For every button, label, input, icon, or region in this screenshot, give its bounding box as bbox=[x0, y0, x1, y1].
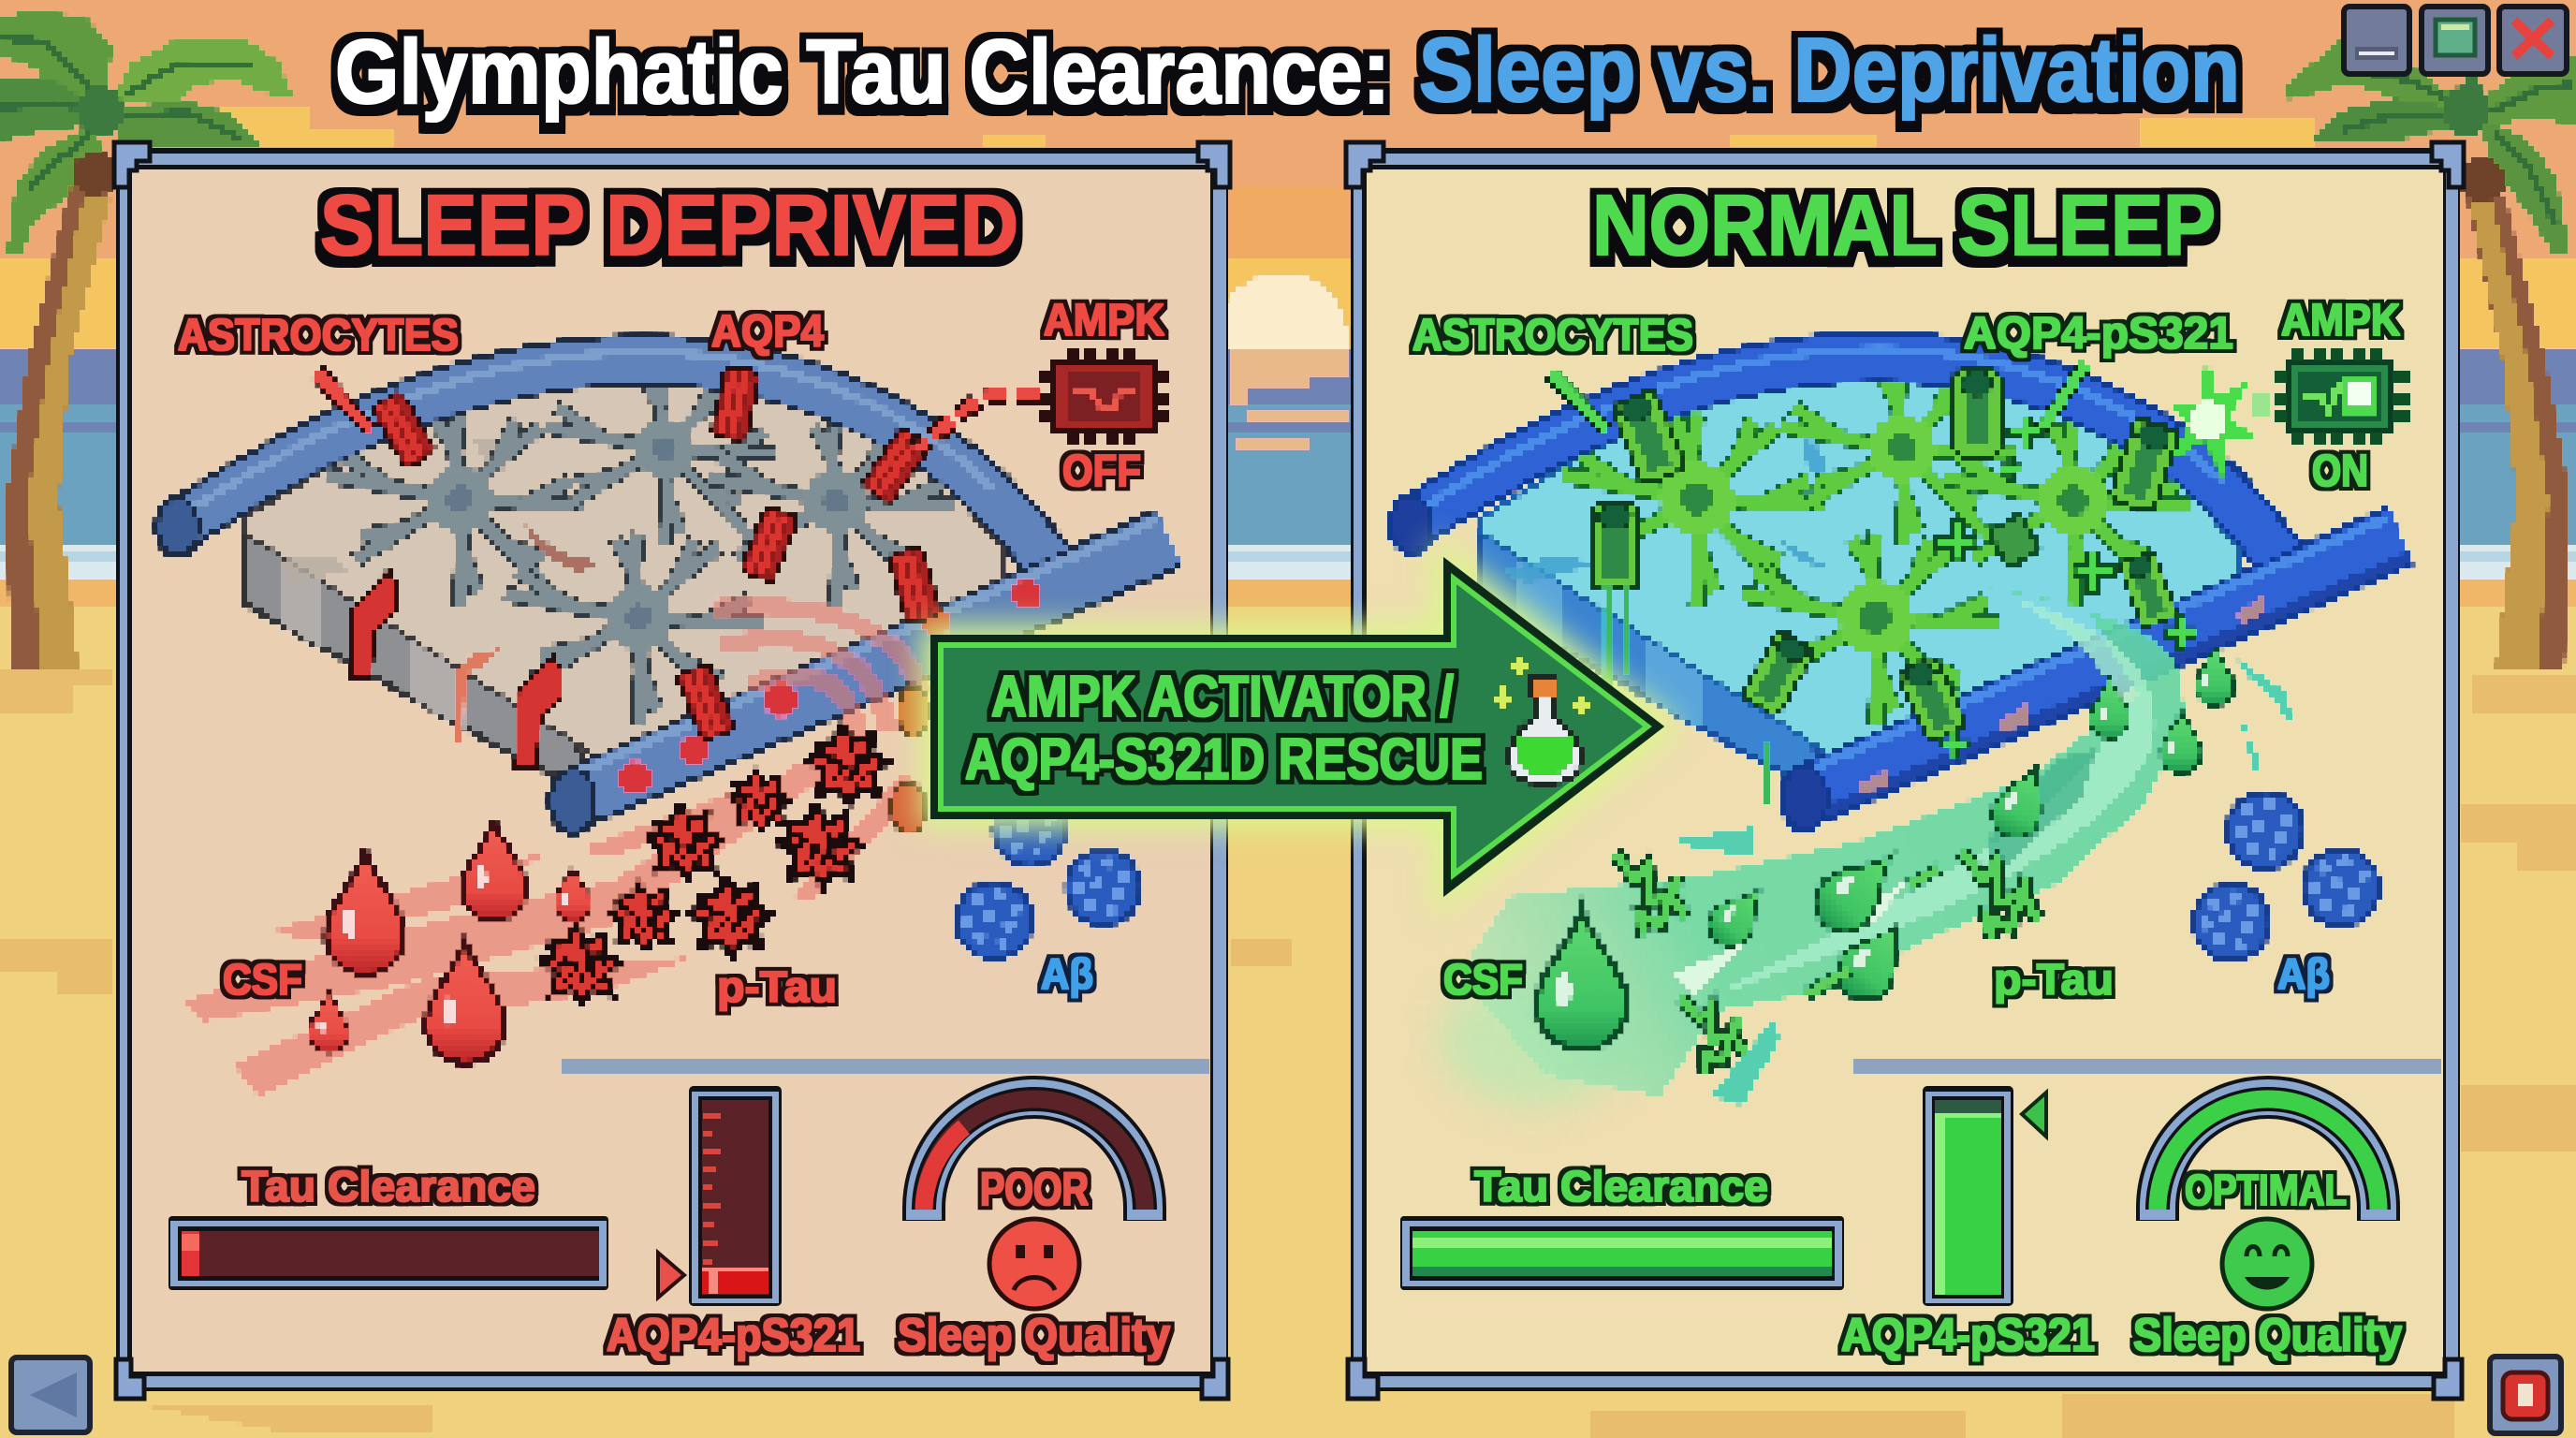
arrow text bbox=[965, 665, 1483, 792]
labels: sleep deprived: POOR bbox=[980, 1163, 1089, 1215]
labels: normal sleep: Sleep Quality bbox=[2133, 1309, 2402, 1361]
heading: sleep deprived: SLEEP DEPRIVED bbox=[320, 178, 1018, 273]
arrow: rescue treatment bbox=[935, 566, 1657, 888]
labels: sleep deprived: Sleep Quality bbox=[898, 1309, 1170, 1361]
labels: normal sleep: Tau Clearance bbox=[1474, 1162, 1768, 1211]
window buttons bbox=[2344, 7, 2567, 74]
button: close bbox=[2499, 7, 2567, 74]
illustration: sleep deprived brain tissue bbox=[157, 352, 1168, 1095]
labels: sleep deprived: OFF bbox=[1062, 447, 1141, 496]
labels: normal sleep: AQP4-pS321 bbox=[1841, 1309, 2095, 1361]
AQP4-pS321 gauge: low bbox=[658, 1086, 782, 1306]
tau clearance bar: full bbox=[1400, 1216, 1844, 1290]
button: maximize bbox=[2422, 7, 2488, 74]
divider left bbox=[562, 1059, 1209, 1074]
labels: sleep deprived: p-Tau bbox=[717, 962, 837, 1011]
left palm tree bbox=[0, 11, 290, 667]
right palm tree bbox=[2286, 42, 2576, 667]
icon: sad face bbox=[989, 1219, 1079, 1309]
labels: normal sleep: ON bbox=[2312, 447, 2368, 496]
main title: Glymphatic Tau Clearance: bbox=[335, 21, 1390, 123]
heading: normal sleep: NORMAL SLEEP bbox=[1592, 178, 2216, 273]
arrow text: AMPK ACTIVATOR / bbox=[991, 665, 1454, 729]
AQP4-pS321 gauge: high bbox=[1923, 1086, 2046, 1306]
labels: sleep deprived: Tau Clearance bbox=[242, 1162, 535, 1211]
panel: normal sleep bbox=[1346, 142, 2464, 1399]
icon: happy face bbox=[2222, 1219, 2312, 1309]
panel: sleep deprived bbox=[114, 142, 1230, 1399]
labels: sleep deprived: AMPK bbox=[1044, 296, 1164, 345]
labels: sleep deprived: AQP4 bbox=[711, 307, 824, 357]
AMPK on chip with spark bbox=[2168, 354, 2400, 477]
labels: sleep deprived bbox=[178, 296, 1170, 1361]
panel frame left bbox=[114, 142, 1230, 1399]
labels: normal sleep: ASTROCYTES bbox=[1412, 311, 1693, 360]
labels: normal sleep: Aβ bbox=[2277, 949, 2330, 998]
AMPK off chip bbox=[917, 354, 1161, 449]
illustration: normal sleep brain tissue bbox=[1391, 349, 2409, 1105]
icon: potion bbox=[1495, 657, 1589, 783]
button: record bbox=[2490, 1357, 2561, 1433]
labels: normal sleep: CSF bbox=[1443, 955, 1523, 1004]
labels: sleep deprived: ASTROCYTES bbox=[178, 311, 459, 360]
tau clearance bar: low bbox=[168, 1216, 608, 1290]
labels: sleep deprived: CSF bbox=[223, 955, 302, 1004]
labels: normal sleep: p-Tau bbox=[1994, 955, 2114, 1004]
labels: sleep deprived: Aβ bbox=[1041, 949, 1093, 998]
panel frame right bbox=[1346, 142, 2464, 1399]
labels: normal sleep: OPTIMAL bbox=[2185, 1166, 2347, 1214]
button: minimize bbox=[2344, 7, 2409, 74]
button: back bbox=[11, 1357, 90, 1432]
labels: normal sleep: AQP4-pS321 bbox=[1964, 309, 2233, 359]
sleep quality gauge: poor bbox=[924, 1097, 1145, 1221]
arrow text: AQP4-S321D RESCUE bbox=[965, 727, 1483, 792]
labels: normal sleep: AMPK bbox=[2281, 296, 2400, 345]
labels: sleep deprived: AQP4-pS321 bbox=[607, 1309, 860, 1361]
divider right bbox=[1853, 1059, 2441, 1074]
labels: normal sleep bbox=[1412, 296, 2402, 1361]
main title bbox=[335, 19, 2240, 123]
main title: Sleep vs. Deprivation bbox=[1419, 19, 2240, 121]
sleep quality gauge: optimal bbox=[2158, 1097, 2378, 1221]
